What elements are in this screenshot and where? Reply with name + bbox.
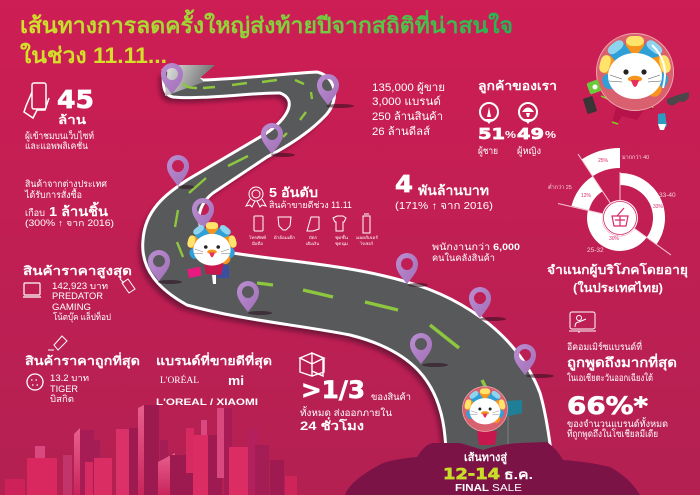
stat: most mentioned brand: อีคอมเมิร์ซแบรนด์ที่ — [567, 340, 642, 353]
our customers: ผู้ชาย — [478, 146, 498, 157]
chart heading: จำแนกผู้บริโภคโดยอายุ — [547, 262, 688, 278]
chart: consumers by age: 25-32 — [587, 247, 604, 254]
title: เส้นทางการลดครั้งใหญ่ส่งท้ายปีจากสถิติที่น่าสนใจ — [20, 9, 513, 39]
our customers: ผู้หญิง — [517, 146, 541, 157]
stat: one third of goods — [300, 353, 411, 433]
stat: one third of goods: >1/3 — [301, 376, 365, 404]
chart: consumers by age: 12% — [581, 193, 592, 199]
chart: consumers by age: มากกว่า 40 — [622, 155, 649, 161]
best-selling brands: mi — [228, 373, 244, 388]
top 5 products: โทรศัพท์ — [249, 235, 266, 240]
chart: consumers by age — [548, 148, 676, 255]
road — [139, 65, 557, 495]
mascot: floating astronaut lion — [583, 34, 689, 130]
top 5 products — [246, 185, 379, 247]
stat: warehouse staff: คนในคลังสินค้า — [432, 252, 495, 264]
stat: cross-border orders — [24, 179, 114, 228]
best-selling brands — [156, 352, 272, 408]
chart: consumers by age: 33% — [653, 204, 664, 210]
stat: most mentioned brand: 66%* — [567, 392, 649, 420]
stat: one third of goods: 24 ชั่วโมง — [300, 417, 364, 433]
stat: 4 thousand million baht: พันล้านบาท — [418, 183, 489, 198]
top 5 products: ผ้าอ้อมเด็ก — [274, 234, 296, 240]
stat: most mentioned brand — [567, 312, 677, 440]
stat: 4 thousand million baht — [395, 172, 493, 212]
icon: female — [519, 103, 537, 124]
stat: most mentioned brand: ของจำนวนแบรนด์ทั้งหมด — [567, 417, 668, 430]
stat: 45 million visitors — [24, 83, 94, 152]
stat: most expensive item: สินค้าราคาสูงสุด — [23, 264, 132, 279]
stat: cross-border orders: สินค้าจากต่างประเทศ — [25, 179, 107, 190]
cloud with final sale: 12-14 — [443, 465, 500, 483]
stat: warehouse staff: พนักงานกว่า 6,000 — [432, 242, 520, 253]
top 5 products: 5 อันดับ — [269, 185, 318, 200]
lane dashes — [175, 80, 487, 390]
chart heading — [547, 262, 688, 295]
icon: phone — [583, 96, 597, 114]
stat: warehouse staff — [432, 242, 520, 264]
our customers: % — [545, 130, 556, 141]
stat: 45 million visitors: ล้าน — [58, 113, 87, 127]
stat: most mentioned brand: ในเอเชียตะวันออกเฉียงใต้ — [567, 372, 653, 384]
mascot: running with shopping bags — [186, 222, 238, 284]
best-selling brands: L'ORÉAL — [160, 375, 199, 385]
cloud with final sale: ธ.ค. — [504, 467, 533, 482]
stat: 4 thousand million baht: (171% ↑ จาก 2016) — [395, 201, 493, 212]
marketplace figures: 250 ล้านสินค้า — [372, 111, 443, 123]
stat: cross-border orders: (300% ↑ จาก 2016) — [25, 218, 114, 228]
best-selling brands: แบรนด์ที่ขายดีที่สุด — [156, 352, 272, 369]
marketplace figures: 26 ล้านดีลส์ — [372, 125, 430, 138]
icon: shopping basket — [612, 208, 628, 226]
marketplace figures: 3,000 แบรนด์ — [372, 95, 441, 108]
stat: 45 million visitors: และแอพพลิเคชั่น — [25, 139, 88, 152]
stat: cheapest item: TIGER — [50, 384, 78, 394]
stat: 45 million visitors: ผู้เข้าชมบนเว็บไซท์ — [25, 129, 94, 142]
body — [604, 96, 654, 124]
top 5 products: ชุดนุ่ม — [335, 241, 348, 247]
top 5 products: บัตร — [309, 235, 318, 240]
chart: consumers by age: 30% — [609, 236, 620, 242]
top 5 products: เติมเงิน — [306, 241, 319, 246]
icon: presenter on screen — [569, 312, 596, 333]
stat: most expensive item: GAMING — [52, 302, 91, 312]
chart: consumers by age: 25% — [598, 158, 609, 164]
top 5 products: ไรเซอร์ — [359, 241, 374, 246]
icon: sunglasses — [667, 92, 689, 105]
stat: cross-border orders: 1 ล้านชิ้น — [49, 201, 108, 219]
mascot: holding flag — [462, 386, 522, 445]
top 5 products: ชุดชั้น — [335, 233, 348, 241]
our customers — [478, 79, 557, 157]
icon: award ribbon — [246, 187, 266, 207]
chart: consumers by age: 33-40 — [659, 192, 676, 199]
road start flag — [165, 65, 215, 96]
our customers: % — [505, 130, 516, 141]
stat: 4 thousand million baht: 4 — [395, 172, 413, 198]
stat: most expensive item: 142,923 บาท — [52, 281, 108, 291]
chart heading: (ในประเทศไทย) — [573, 280, 663, 295]
top 5 products: มอยส์เจอร์ — [356, 235, 379, 240]
icon: sneaker — [658, 113, 667, 130]
stat: cheapest item: สินค้าราคาถูกที่สุด — [25, 352, 140, 369]
cloud with final sale: FINAL — [455, 483, 489, 494]
stat: most expensive item — [23, 264, 135, 323]
cloud with final sale: เส้นทางสู่ — [464, 451, 507, 465]
icon: price tag — [48, 336, 67, 350]
icon: parcel box — [300, 353, 324, 376]
marketplace figures: 135,000 ผู้ขาย — [372, 82, 445, 94]
top 5 products: สินค้าขายดีช่วง 11.11 — [269, 200, 352, 210]
stat: one third of goods: ทั้งหมด ส่งออกภายใน — [300, 406, 393, 419]
title: ในช่วง 11.11... — [20, 42, 167, 68]
icon row: products — [254, 214, 370, 233]
our customers: 49 — [517, 125, 544, 143]
icon: price tag — [120, 279, 135, 293]
stat: cross-border orders: ได้รับการสั่งซื้อ — [24, 188, 82, 201]
icon: biscuit — [27, 374, 43, 390]
best-selling brands: L'OREAL / XIAOMI — [156, 397, 258, 408]
stat: most expensive item: PREDATOR — [52, 291, 104, 301]
stat: cross-border orders: เกือบ — [25, 208, 45, 219]
cloud with final sale: SALE — [492, 483, 522, 494]
our customers: ลูกค้าของเรา — [478, 79, 557, 94]
stat: cheapest item — [25, 336, 140, 404]
icon: hand holding phone — [24, 83, 49, 118]
stat: cheapest item: บิสกิต — [50, 394, 74, 404]
helmet — [596, 34, 674, 110]
stat: most mentioned brand: ที่ถูกพูดถึงในโซเชียลมีเดีย — [567, 427, 658, 440]
chart: consumers by age: ต่ำกว่า 25 — [548, 183, 572, 191]
title — [20, 9, 513, 68]
marketplace figures — [372, 82, 445, 138]
stat: most expensive item: โน้ตบุ๊ค แล็ปท็อป — [53, 310, 111, 323]
map pins — [148, 63, 554, 378]
stat: 45 million visitors: 45 — [57, 85, 94, 114]
stat: cheapest item: 13.2 บาท — [50, 373, 89, 383]
cloud with final sale — [345, 442, 640, 495]
city skyline — [5, 405, 297, 495]
stat: one third of goods: ของสินค้า — [371, 392, 411, 403]
icon: male — [480, 103, 498, 124]
top 5 products: มือถือ — [252, 241, 264, 246]
icon: camera — [586, 79, 602, 95]
icon: laptop — [23, 283, 41, 297]
stat: most mentioned brand: ถูกพูดถึงมากที่สุด — [567, 353, 677, 371]
our customers: 51 — [478, 125, 505, 143]
